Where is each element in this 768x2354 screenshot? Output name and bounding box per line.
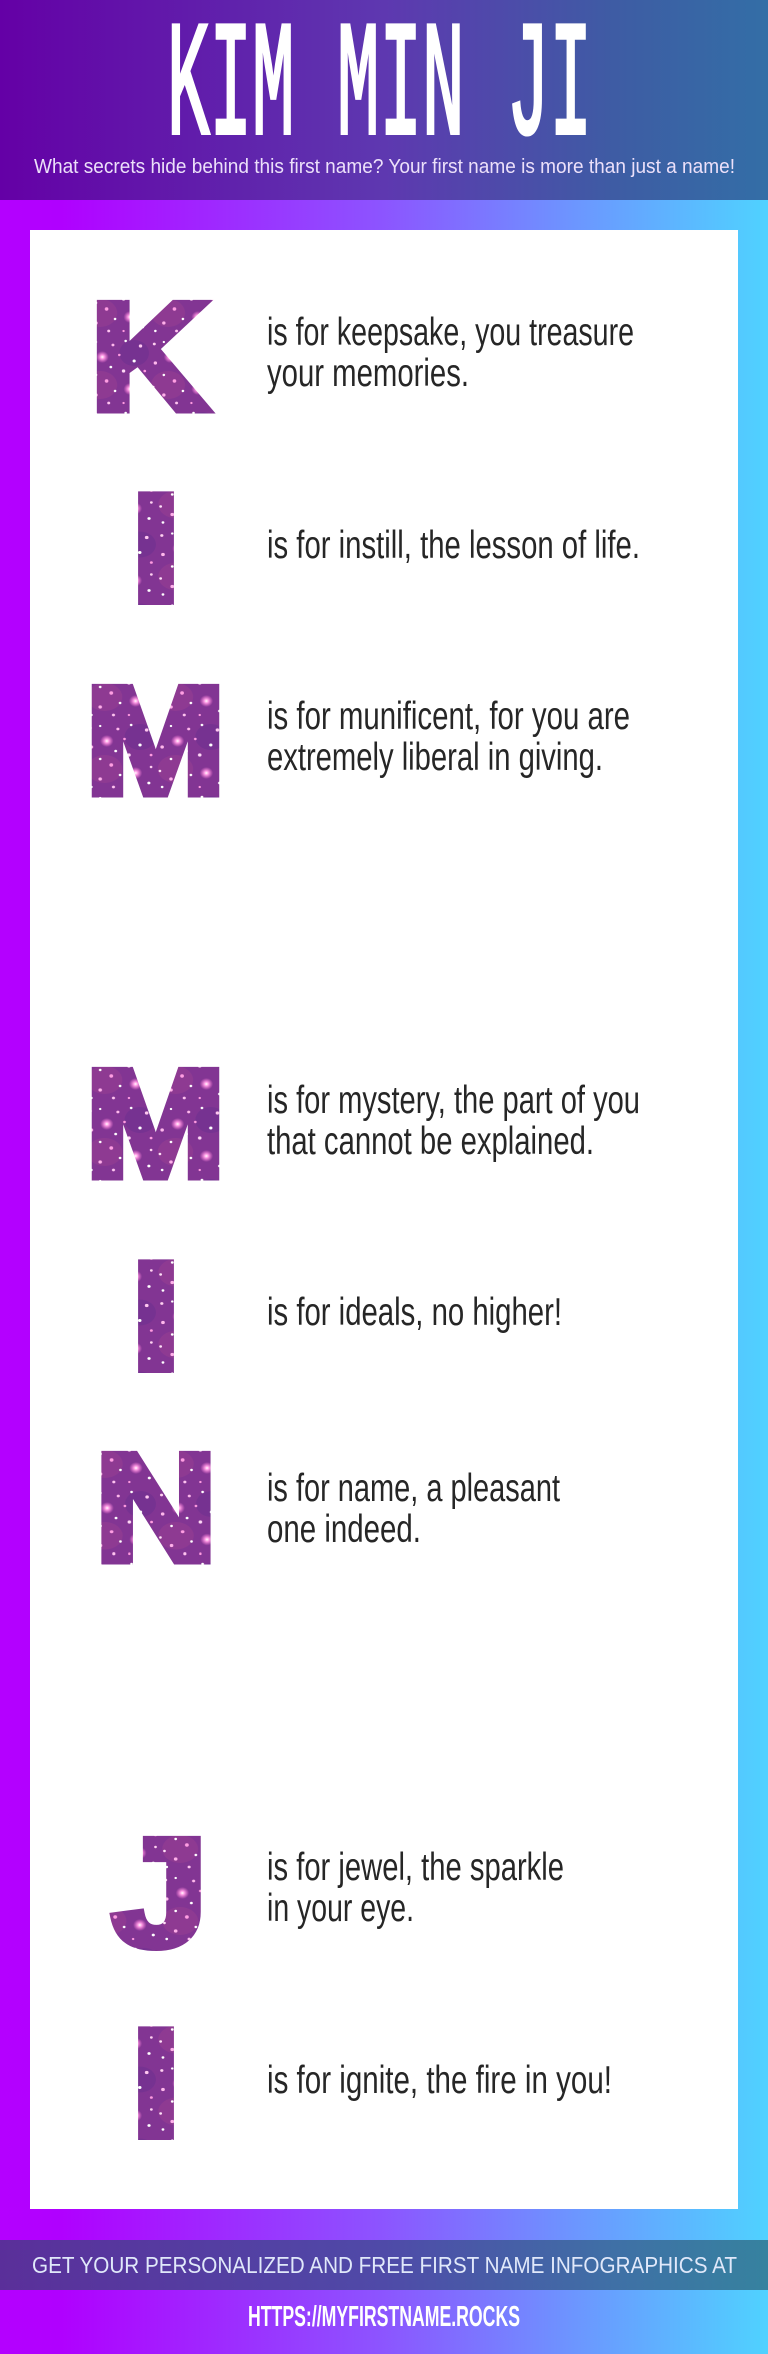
row: M	[85, 655, 630, 825]
header band	[0, 0, 768, 200]
description N: one indeed.	[267, 1508, 421, 1551]
description I third: is for ignite, the fire in you!	[267, 2059, 612, 2102]
letter J: J	[113, 1808, 207, 1978]
description J	[267, 1846, 564, 1930]
subtitle: What secrets hide behind this first name? Your first name is more than just a name!	[34, 156, 735, 178]
description M	[267, 695, 630, 779]
description M: extremely liberal in giving.	[267, 736, 603, 779]
row: K	[91, 272, 634, 442]
description N	[267, 1467, 560, 1551]
letter N: N	[95, 1424, 217, 1593]
footer url: HTTPS://MYFIRSTNAME.ROCKS	[248, 2301, 520, 2333]
description K: your memories.	[267, 352, 469, 395]
description J: is for jewel, the sparkle	[267, 1846, 564, 1889]
title: KIM MIN JI	[167, 0, 592, 182]
description J: in your eye.	[267, 1887, 414, 1930]
row: I second	[132, 1231, 562, 1401]
white content panel	[30, 230, 738, 2209]
row: M second	[85, 1038, 640, 1208]
description K	[267, 311, 634, 395]
letter I: I	[132, 1231, 180, 1401]
row: I	[132, 463, 640, 633]
row: J	[113, 1808, 564, 1978]
description I: is for instill, the lesson of life.	[267, 524, 640, 567]
letter M: M	[85, 1038, 226, 1208]
description K: is for keepsake, you treasure	[267, 311, 634, 354]
row: I third	[132, 1998, 612, 2168]
description M second	[267, 1079, 640, 1163]
description M second: is for mystery, the part of you	[267, 1079, 640, 1122]
row: N	[95, 1424, 560, 1593]
description I second: is for ideals, no higher!	[267, 1291, 562, 1334]
footer band	[0, 2240, 768, 2290]
letter I: I	[132, 463, 180, 633]
description N: is for name, a pleasant	[267, 1467, 560, 1510]
letter M: M	[85, 655, 226, 825]
description M second: that cannot be explained.	[267, 1120, 594, 1163]
description M: is for munificent, for you are	[267, 695, 630, 738]
letter I: I	[132, 1998, 180, 2168]
letter K: K	[91, 272, 207, 442]
